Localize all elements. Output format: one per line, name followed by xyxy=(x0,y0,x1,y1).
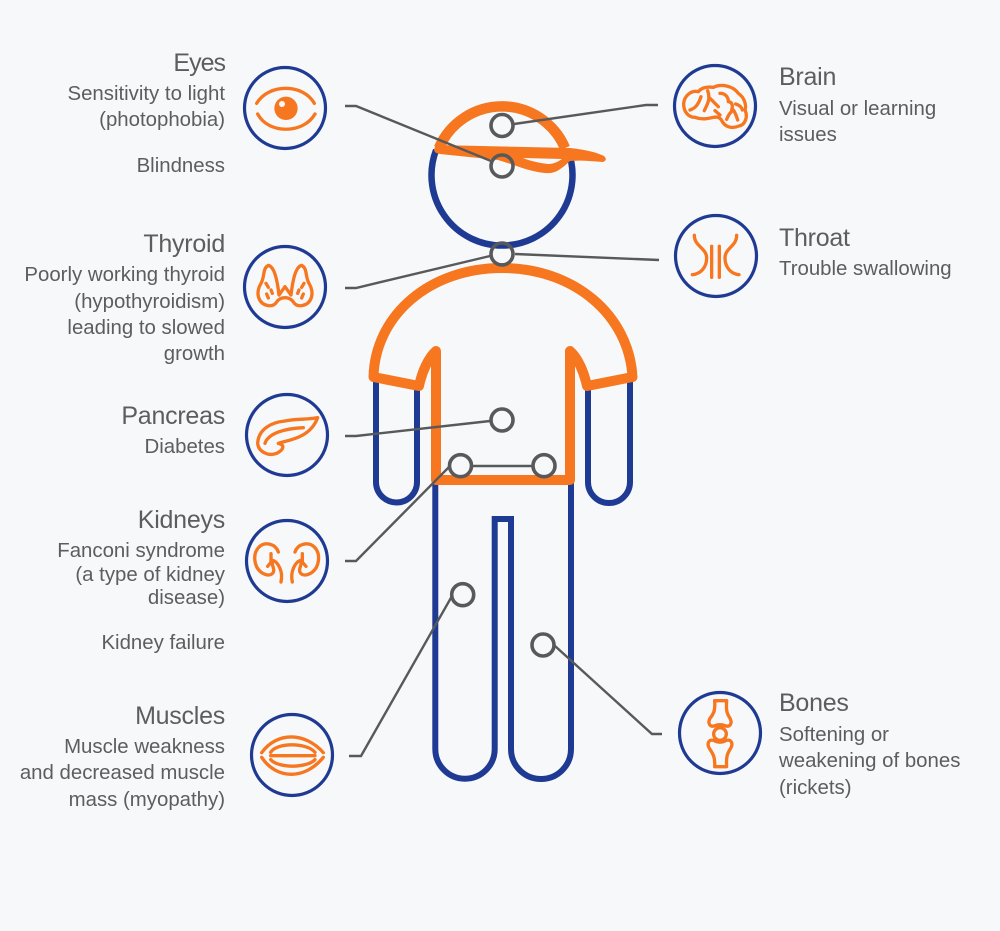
cap xyxy=(434,106,606,173)
text: brain: issues xyxy=(779,124,837,146)
body figure xyxy=(374,106,632,779)
text: bones: Bones xyxy=(779,689,849,717)
text: bones: weakening of bones xyxy=(778,750,960,772)
icon: pancreas xyxy=(246,394,328,476)
text: bones: (rickets) xyxy=(779,777,852,799)
icon: kidneys xyxy=(246,520,328,602)
text: brain: Visual or learning xyxy=(779,98,936,120)
left arm xyxy=(376,378,417,502)
shirt xyxy=(374,268,632,480)
right arm xyxy=(588,378,630,503)
text: thyroid: growth xyxy=(164,343,225,365)
legs xyxy=(435,480,571,779)
text: kidneys: Fanconi syndrome xyxy=(57,540,225,562)
text: eyes: Sensitivity to light xyxy=(67,83,225,105)
text: brain xyxy=(779,63,936,146)
text: muscles: Muscle weakness xyxy=(64,736,225,758)
text: bones xyxy=(778,689,960,799)
icon: thyroid xyxy=(244,246,326,328)
text: bones: Softening or xyxy=(779,724,889,746)
text: throat: Throat xyxy=(779,224,850,252)
icon: brain xyxy=(674,66,756,146)
text: pancreas xyxy=(121,402,225,458)
text: thyroid xyxy=(24,230,225,365)
text: kidneys: Kidney failure xyxy=(101,632,225,654)
icon: muscle xyxy=(252,714,332,796)
head xyxy=(432,150,572,246)
icon: bones xyxy=(680,692,760,774)
text: kidneys xyxy=(57,506,226,654)
text: muscles: mass (myopathy) xyxy=(69,789,225,811)
text: kidneys: (a type of kidney xyxy=(75,564,226,586)
text: eyes xyxy=(67,49,225,177)
text: eyes: Blindness xyxy=(137,155,225,177)
text: throat xyxy=(779,224,952,280)
text: pancreas: Diabetes xyxy=(145,436,225,458)
text: thyroid: (hypothyroidism) xyxy=(74,291,225,313)
right labels xyxy=(778,63,960,799)
text: thyroid: Poorly working thyroid xyxy=(24,264,225,286)
text: throat: Trouble swallowing xyxy=(779,258,952,280)
text: thyroid: leading to slowed xyxy=(67,317,225,339)
icon: eye xyxy=(244,68,326,148)
text: muscles: and decreased muscle xyxy=(20,762,225,784)
text: muscles xyxy=(20,702,225,811)
text: eyes: (photophobia) xyxy=(99,109,225,131)
marker dots xyxy=(450,114,555,656)
text: kidneys: disease) xyxy=(148,587,225,609)
text: muscles: Muscles xyxy=(135,702,225,730)
text: brain: Brain xyxy=(779,63,836,91)
text: pancreas: Pancreas xyxy=(121,402,225,430)
icon: throat xyxy=(676,216,756,296)
left labels xyxy=(20,49,226,811)
text: eyes: Eyes xyxy=(173,49,225,77)
text: kidneys: Kidneys xyxy=(138,506,225,534)
text: thyroid: Thyroid xyxy=(143,230,225,258)
leader lines xyxy=(345,105,662,756)
